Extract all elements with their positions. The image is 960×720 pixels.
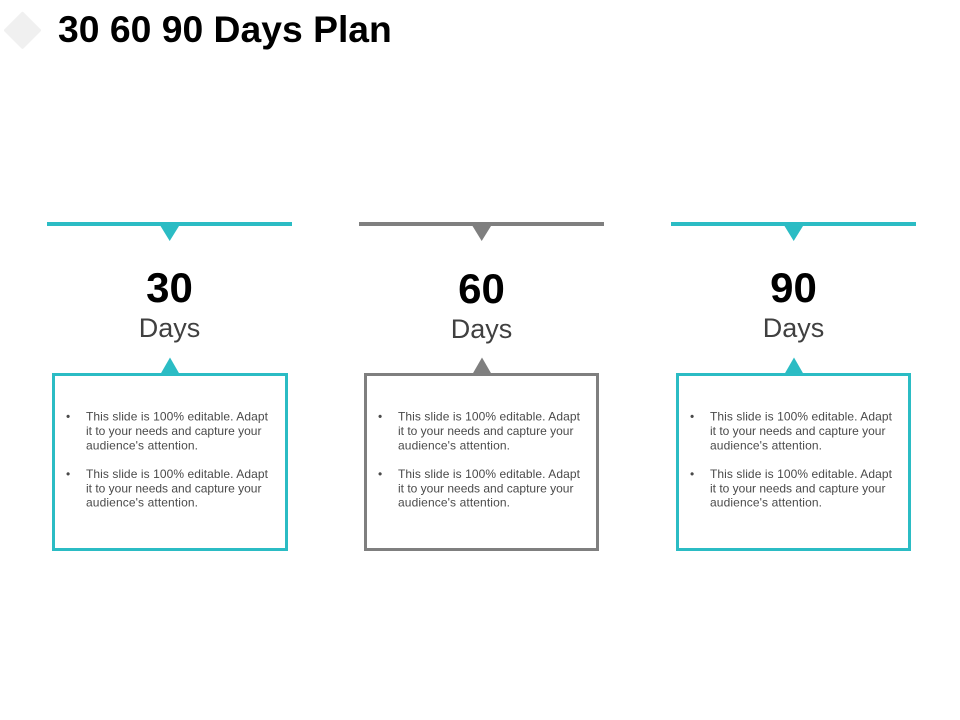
bullet text block: • — [690, 410, 694, 424]
label: days: Days — [451, 314, 512, 344]
bullet text block: audience's attention. — [398, 496, 510, 510]
icon: title diamond — [6, 13, 40, 47]
title: 30 60 90 Days Plan — [58, 8, 392, 50]
bullet text block: audience's attention. — [86, 496, 198, 510]
text box — [366, 374, 598, 550]
text box — [54, 374, 286, 550]
box pointer — [472, 358, 492, 374]
top bar with pointer — [359, 222, 604, 241]
box pointer — [160, 358, 180, 374]
bullet text block: This slide is 100% editable. Adapt — [86, 467, 269, 481]
label: days: Days — [139, 313, 200, 343]
bullet text block: audience's attention. — [710, 496, 822, 510]
panel: 60 days — [359, 222, 604, 550]
bullet text block: • — [66, 410, 70, 424]
number: 60: 60 — [458, 265, 505, 312]
number: 90: 90 — [770, 264, 817, 311]
bullet text block: audience's attention. — [86, 438, 198, 452]
bullet text block — [690, 410, 893, 510]
bullet text block: it to your needs and capture your — [86, 424, 261, 438]
bullet text block: This slide is 100% editable. Adapt — [398, 410, 581, 424]
text box — [678, 374, 910, 550]
top bar with pointer — [671, 222, 916, 241]
bullet text block: This slide is 100% editable. Adapt — [710, 467, 893, 481]
bullet text block — [66, 410, 269, 510]
box pointer — [784, 358, 804, 374]
bullet text block: it to your needs and capture your — [710, 424, 885, 438]
bullet text block: audience's attention. — [398, 438, 510, 452]
bullet text block — [378, 410, 581, 510]
bullet text block: it to your needs and capture your — [398, 482, 573, 496]
bullet text block: it to your needs and capture your — [86, 482, 261, 496]
bullet text block: • — [378, 467, 382, 481]
panel: 90 days — [671, 222, 916, 550]
panel: 30 days — [47, 222, 292, 550]
bullet text block: • — [690, 467, 694, 481]
bullet text block: audience's attention. — [710, 438, 822, 452]
label: days: Days — [763, 313, 824, 343]
bullet text block: it to your needs and capture your — [710, 482, 885, 496]
number: 30: 30 — [146, 264, 193, 311]
bullet text block: This slide is 100% editable. Adapt — [398, 467, 581, 481]
bullet text block: it to your needs and capture your — [398, 424, 573, 438]
bullet text block: • — [66, 467, 70, 481]
bullet text block: This slide is 100% editable. Adapt — [710, 410, 893, 424]
top bar with pointer — [47, 222, 292, 241]
bullet text block: This slide is 100% editable. Adapt — [86, 410, 269, 424]
bullet text block: • — [378, 410, 382, 424]
